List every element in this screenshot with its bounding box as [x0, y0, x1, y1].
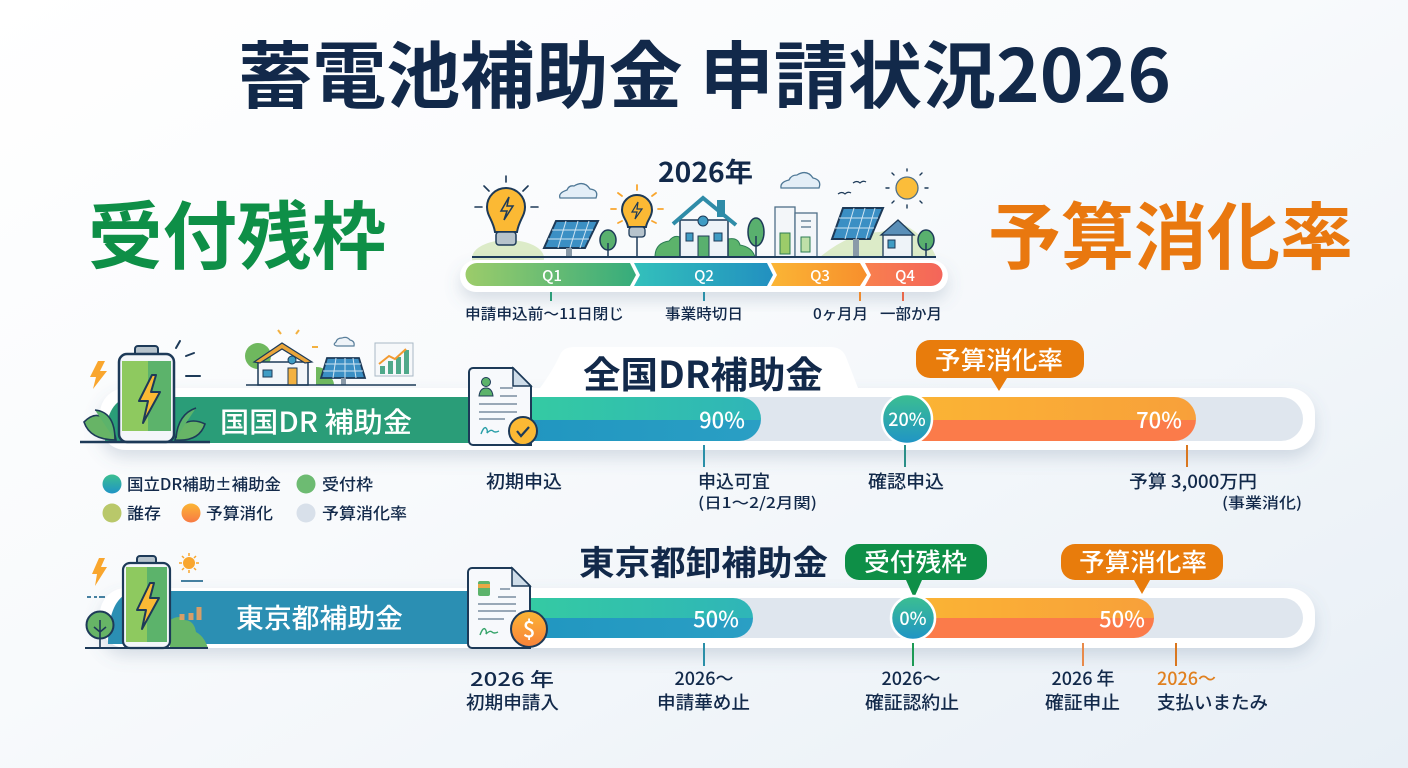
bar: budget 70%: 70% — [1136, 403, 1182, 435]
timeline labels: 申請申込前〜11日閉じ — [465, 303, 624, 324]
marker: 20%: 20% — [888, 406, 926, 432]
milestone labels: 2026 年 — [470, 665, 554, 692]
bar: budget 50%: 50% — [1099, 602, 1145, 634]
milestone labels: 初期申請入 — [466, 689, 559, 715]
timeline labels: 一部か月 — [880, 303, 942, 324]
legend: 予算消化 — [206, 500, 273, 524]
panel: national DR subsidy — [80, 330, 1315, 524]
callout: remaining acceptance — [845, 543, 987, 598]
bar: budget 70% — [900, 397, 1196, 441]
Q2 — [634, 263, 773, 286]
marker: 0% — [891, 596, 935, 640]
icon: house, solar panel and chart — [245, 330, 416, 385]
milestone labels: 支払いまたみ — [1157, 689, 1268, 715]
Q3 — [771, 263, 867, 286]
milestone labels: 初期申込 — [486, 468, 562, 494]
track card — [100, 347, 1315, 450]
ticks — [704, 445, 1187, 467]
icon: document with coin — [468, 568, 547, 648]
Q1: Q1 — [542, 265, 562, 286]
bar: remaining 90% — [532, 397, 761, 441]
marker: 20% — [882, 394, 932, 444]
timeline labels: 0ヶ月月 — [813, 303, 868, 324]
heading: budget consumption: 予算消化率 — [988, 179, 1353, 285]
milestone labels — [466, 665, 1268, 715]
milestone labels: 申請華め止 — [657, 689, 750, 715]
legend: 予算消化率 — [322, 500, 407, 524]
milestone labels: 確認申込 — [868, 468, 944, 494]
bar: remaining 50% — [531, 598, 753, 638]
track card — [100, 588, 1315, 648]
banner — [108, 591, 475, 644]
callout: budget consumption: 予算消化率 — [935, 341, 1063, 377]
timeline labels: 事業時切日 — [665, 303, 743, 324]
milestone labels: 申込可宜 — [698, 468, 770, 494]
legend — [102, 471, 407, 524]
banner: 東京都補助金 — [236, 597, 403, 636]
milestone labels: 確証申止 — [1045, 689, 1120, 715]
icon: application document — [469, 368, 537, 445]
bar: remaining 90%: 90% — [699, 403, 745, 435]
timeline labels — [465, 303, 942, 324]
panel: Tokyo subsidy — [85, 536, 1315, 715]
quarter ticks — [551, 292, 903, 301]
heading: remaining acceptance: 受付残枠 — [88, 178, 386, 285]
bar: budget 50% — [900, 598, 1154, 638]
Q2: Q2 — [694, 265, 714, 286]
milestone labels: (事業消化) — [1222, 492, 1302, 513]
callout: budget consumption — [1061, 543, 1223, 594]
milestone labels: 2026〜 — [674, 665, 734, 691]
subsidy title: 東京都卸補助金 — [579, 536, 828, 585]
Q4: Q4 — [895, 265, 915, 286]
icon: battery with tree — [85, 553, 208, 648]
milestone labels: 2026 年 — [1051, 665, 1115, 691]
milestone labels: 2026〜 — [1157, 665, 1216, 691]
ticks — [704, 643, 1176, 666]
Q3: Q3 — [810, 265, 830, 286]
Q4 — [865, 263, 942, 286]
milestone labels: 予算 3,000万円 — [1129, 468, 1257, 494]
legend: 国立DR補助±補助金 — [127, 471, 281, 495]
title: 蓄電池補助金 申請状況2026 — [238, 18, 1171, 124]
subsidy title tab: 全国DR補助金 — [583, 345, 823, 399]
callout: remaining acceptance: 受付残枠 — [864, 543, 967, 579]
timeline illustration — [472, 169, 936, 276]
timeline year: 2026年 — [658, 151, 753, 190]
milestone labels: 確証認約止 — [865, 689, 959, 715]
Q1 — [466, 263, 636, 286]
milestone labels: 2026〜 — [881, 665, 941, 691]
banner — [105, 397, 475, 443]
panel: 2026 timeline — [460, 151, 948, 324]
milestone labels: (日1〜2/2月関) — [698, 492, 817, 513]
bar: remaining 50%: 50% — [693, 602, 739, 634]
quarter bar — [460, 260, 948, 292]
legend: 誰存 — [127, 500, 161, 524]
callout: budget consumption — [916, 340, 1084, 391]
icon: document with coin: $ — [523, 612, 535, 644]
legend: 受付枠 — [322, 471, 373, 495]
milestone labels — [486, 468, 1302, 513]
banner: 国国DR 補助金 — [220, 401, 412, 441]
icon: battery — [80, 341, 210, 442]
callout: budget consumption: 予算消化率 — [1079, 543, 1207, 579]
marker: 0%: 0% — [899, 605, 927, 631]
